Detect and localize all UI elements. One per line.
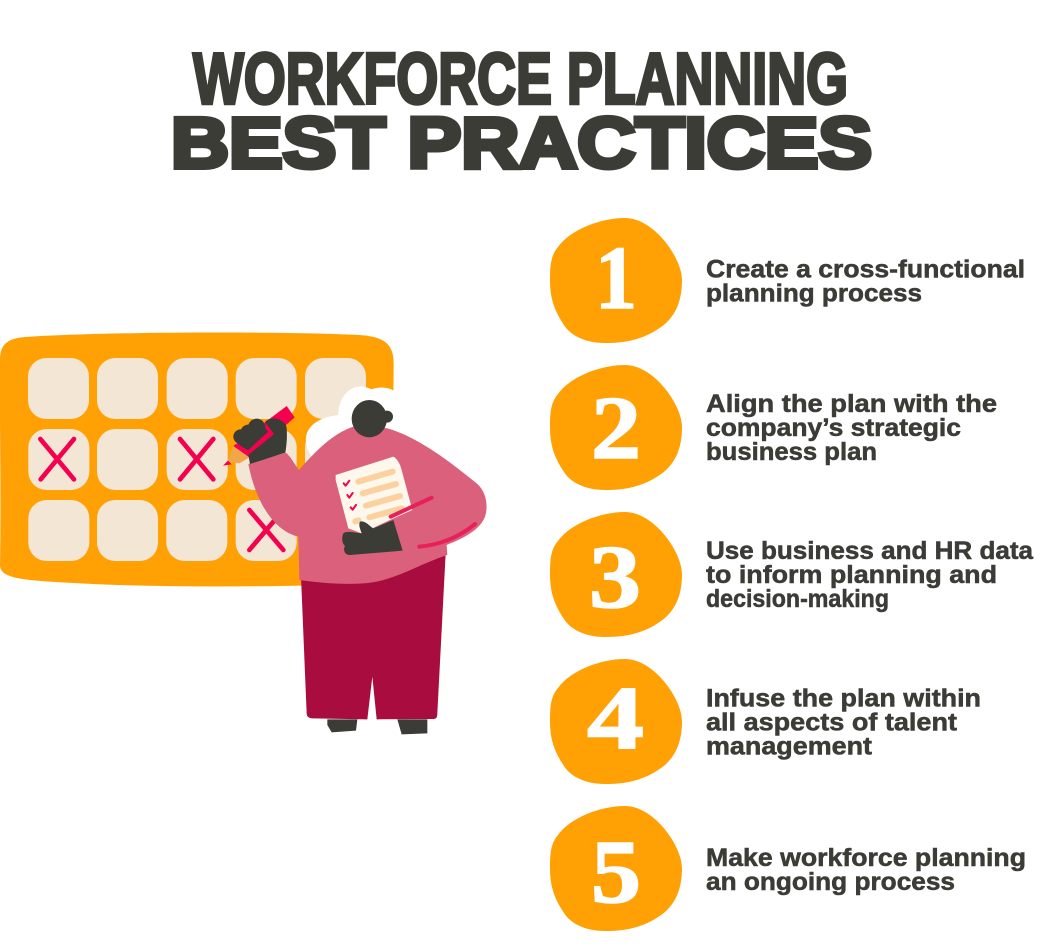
- step 5: [550, 806, 1026, 931]
- step 4: [550, 659, 981, 784]
- badge 2: [550, 365, 682, 490]
- step 4: Infuse the plan within: [706, 684, 981, 712]
- step 1: planning process: [706, 280, 922, 308]
- title: [171, 40, 872, 184]
- sweater: [248, 427, 487, 584]
- step 3: to inform planning and: [706, 561, 997, 589]
- step 5: Make workforce planning: [706, 844, 1026, 872]
- upper hand fingers: [233, 419, 268, 450]
- step 3: decision-making: [706, 585, 889, 613]
- step 2: 2: [591, 379, 641, 478]
- step 5: 5: [591, 823, 641, 922]
- step 2: [550, 365, 997, 490]
- illustration: person marking a calendar: [0, 333, 487, 734]
- badge 5: [550, 806, 682, 931]
- marker pen: [223, 406, 295, 466]
- sweater fold lines: [391, 498, 475, 547]
- step 3: [550, 512, 1034, 637]
- step 4: all aspects of talent: [706, 708, 958, 736]
- step 2: company’s strategic: [706, 414, 961, 442]
- pants: [301, 553, 446, 719]
- step 4: 4: [587, 669, 644, 768]
- title: BEST PRACTICES: [171, 104, 872, 184]
- badge 1: [550, 218, 682, 343]
- step 4: management: [706, 732, 873, 760]
- step 1: Create a cross-functional: [706, 256, 1025, 284]
- step 5: an ongoing process: [706, 868, 955, 896]
- upper hand palm and thumb: [248, 418, 287, 464]
- step 2: Align the plan with the: [706, 390, 997, 418]
- lower hand: [342, 520, 403, 555]
- step 1: [550, 218, 1025, 343]
- badge 4: [550, 659, 682, 784]
- step 2: business plan: [706, 438, 877, 466]
- step 3: Use business and HR data: [706, 537, 1034, 565]
- clipboard paper: [336, 457, 412, 533]
- calendar cells: [28, 358, 366, 561]
- step 3: 3: [589, 528, 641, 627]
- shoes: [327, 719, 427, 734]
- step 1: 1: [595, 229, 637, 328]
- hair: [306, 386, 433, 463]
- red cross marks: [40, 439, 283, 550]
- calendar board: [0, 333, 394, 586]
- badge 3: [550, 512, 682, 637]
- head: [352, 400, 393, 437]
